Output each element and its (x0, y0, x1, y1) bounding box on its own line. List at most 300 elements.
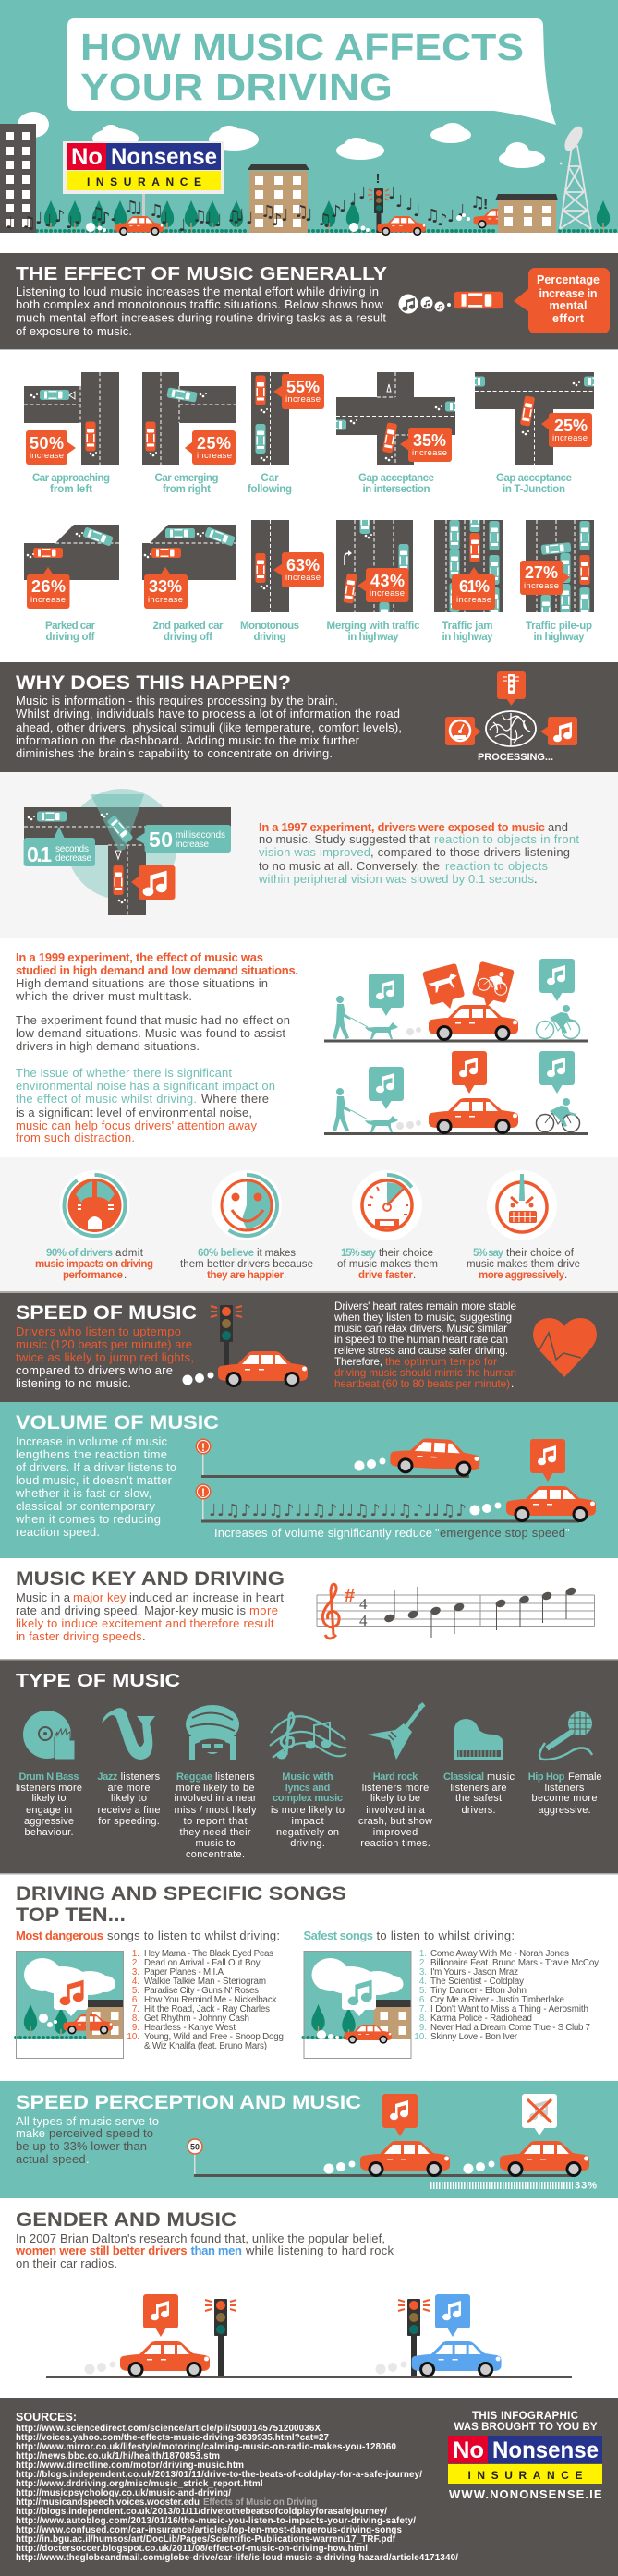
icon: turntable (23, 1711, 75, 1760)
column: drum n bass: listeners more (16, 1783, 82, 1794)
sources list: http://voices.yahoo.com/the-effects-music-driving-3639935.html?cat=27 (16, 2433, 330, 2443)
text (15, 1434, 176, 1539)
list: safest songs: 3. (419, 1967, 427, 1977)
diagram: car approaching from left: from left (50, 484, 92, 495)
diagram: car approaching from left: 50% (30, 434, 64, 453)
text: than men (190, 2243, 242, 2257)
list: dangerous songs: Paradise City - Guns N' Roses (144, 1986, 259, 1996)
column: reggae: Reggae (176, 1772, 212, 1783)
illustration: safe drive (303, 1951, 412, 2059)
body text: Whilst driving, individuals have to process a lot of information the road (16, 707, 400, 720)
text: be up to 33% lower than (16, 2139, 147, 2153)
column: jazz (97, 1772, 161, 1827)
heading: MUSIC KEY AND DRIVING (16, 1568, 285, 1590)
list: safest songs: 4. (419, 1977, 427, 1987)
clouds (18, 112, 545, 168)
list: dangerous songs: Young, Wild and Free - Snoop Dogg (144, 2032, 284, 2042)
column: lyrics: impact (292, 1816, 323, 1827)
column: drum n bass: behaviour. (24, 1827, 74, 1838)
column: lyrics: lyrics and (285, 1783, 330, 1794)
traffic light: ! (375, 171, 381, 187)
text: 1997 experiment: to no music at all. Conversely, the (259, 859, 440, 873)
list: safest songs: Tiny Dancer - Elton John (430, 1986, 527, 1996)
text: . (86, 2152, 90, 2166)
text: perceived speed to (49, 2126, 153, 2140)
caption: Increases of volume significantly reduce (214, 1526, 432, 1540)
list: dangerous songs: 1. (132, 1949, 139, 1959)
list: safest songs: Skinny Love - Bon Iver (430, 2032, 518, 2042)
body text: both complex and monotonous traffic situations. Below shows how (16, 297, 384, 311)
text: 1997 experiment (258, 820, 579, 886)
stat: 90 percent: . (124, 1270, 127, 1281)
text: classical or contemporary (16, 1499, 155, 1513)
chart: no music stopping distance: ! (201, 1441, 205, 1454)
list: safest songs: The Scientist - Coldplay (430, 1977, 524, 1987)
panel: 1997 experiment (0, 772, 618, 938)
column: reggae: miss / most likely (174, 1805, 257, 1816)
diagram: traffic pile-up (520, 520, 594, 643)
diagram: car emerging from right (142, 372, 236, 495)
icon: speed sign (188, 2139, 202, 2154)
panel: driving situations grid (24, 372, 613, 643)
icon: no music bubble (522, 2094, 557, 2135)
text: . (142, 1629, 146, 1643)
stat: 90 percent: admit (115, 1248, 144, 1259)
diagram: gap acceptance in intersection (336, 372, 455, 492)
column: lyrics: is more likely to (271, 1805, 345, 1816)
panel: 1999 experiment text: The experiment found that music had no effect on (16, 1013, 290, 1027)
list: dangerous songs: How You Remind Me - Nickelback (144, 1995, 277, 2005)
column: lyrics: driving. (290, 1838, 325, 1849)
music notes: ♩♫♩♩♪♩♩♫♪♩♫♩♫♩♩♫♩♩♫♩♩♫♪♩♫♩♫♪♩♩♩♩♩♩♩♫♪♩♩♫ (6, 184, 485, 236)
panel: 1999 experiment text (15, 950, 298, 1144)
callout: 50 milliseconds (136, 825, 231, 853)
stat: 90 percent (35, 1170, 153, 1281)
text: on their car radios. (16, 2256, 117, 2270)
heading: DRIVING AND SPECIFIC SONGS (16, 1883, 346, 1905)
sponsor text: THIS INFOGRAPHIC (472, 2411, 578, 2422)
diagram: gap acceptance in T-junction: increase (552, 433, 588, 443)
diagram: car following: 55% (286, 378, 320, 396)
column: jazz: listeners (121, 1772, 161, 1783)
chart: music staff: # (345, 1586, 355, 1606)
sources list (16, 2411, 458, 2563)
column: reggae (174, 1772, 257, 1860)
column: classical: the safest (455, 1793, 502, 1804)
subheadings: songs to listen to whilst driving: (107, 1929, 280, 1942)
sources list: http://blogs.independent.co.uk/2013/01/11/drive-to-the-beats-of-coldplay-for-a-safe-journey/ (16, 2470, 422, 2480)
column: hip hop: aggressive. (538, 1805, 591, 1816)
callout: 0.1 seconds (24, 827, 95, 866)
stat: 5 percent: music makes them drive (467, 1259, 580, 1270)
list: safest songs: 9. (419, 2023, 427, 2033)
column: hip hop: become more (532, 1793, 597, 1804)
chart: music staff: 4 (359, 1595, 368, 1613)
panel: 1999 experiment text: High demand situations are those situations in (16, 976, 268, 990)
stat: 15 percent: of music makes them (337, 1259, 438, 1270)
text: major key (73, 1590, 127, 1604)
list: dangerous songs: 9. (132, 2023, 139, 2033)
subheadings: Most dangerous (16, 1929, 103, 1942)
diagram: merging with traffic: in highway (347, 632, 399, 643)
list: safest songs: 1. (419, 1949, 427, 1959)
text: All types of music serve to (16, 2114, 159, 2128)
list: dangerous songs (127, 1949, 284, 2051)
right text: Therefore, (334, 1355, 382, 1368)
panel: driving and specific songs (16, 1883, 599, 2059)
diagram: car approaching from left: Car approaching (32, 473, 110, 484)
column: hard rock: likely to be (370, 1793, 420, 1804)
right text: in speed to the human heart rate can (334, 1333, 508, 1346)
diagram: traffic jam: in highway (442, 632, 493, 643)
chart: loud music stopping distance (196, 1439, 596, 1522)
list: dangerous songs: Paper Planes - M.I.A (144, 1967, 224, 1977)
panel: the effect of music generally (0, 253, 618, 350)
diagram: traffic jam (434, 520, 503, 643)
left text: music (120 beats per minute) are (16, 1337, 192, 1351)
left text: compared to drivers who are (16, 1363, 173, 1377)
right text: . (511, 1377, 514, 1390)
column: classical: listeners are (451, 1783, 506, 1794)
column: classical: drivers. (462, 1805, 495, 1816)
text: in faster driving speeds (16, 1629, 142, 1643)
diagram: monotonous driving: driving (253, 632, 286, 643)
billboard logo: Nonsense (111, 144, 217, 170)
list: dangerous songs: Hit the Road, Jack - Ray Charles (144, 2004, 270, 2014)
column: lyrics: Music with (282, 1772, 333, 1783)
column: lyrics: negatively on (276, 1827, 339, 1838)
panel: 1999 experiment text: The issue of whether there is significant (16, 1066, 232, 1080)
billboard logo (63, 141, 224, 220)
stat: 60 percent: them better drivers because (180, 1259, 313, 1270)
icon: heart (533, 1318, 597, 1377)
diagram: gap acceptance in T-junction (475, 372, 594, 492)
column: reggae: listeners (215, 1772, 255, 1783)
column: hip hop: Female (568, 1772, 602, 1783)
list: safest songs: 10. (414, 2032, 427, 2042)
chart: no music stopping distance (196, 1436, 480, 1478)
diagram: monotonous driving: 63% (286, 556, 320, 574)
stat: 15 percent (337, 1170, 438, 1281)
column: classical: Classical (443, 1772, 484, 1783)
billboard logo: INSURANCE (87, 175, 201, 188)
left text: Drivers who listen to uptempo (16, 1324, 181, 1338)
text: 1997 experiment: reaction to objects in front (434, 832, 579, 846)
icon: brain processing (445, 671, 577, 763)
diagram: car emerging from right: 25% (197, 434, 231, 453)
diagram: traffic pile-up: increase (524, 581, 559, 591)
sponsor text (454, 2411, 598, 2433)
stat: 60 percent: . (284, 1270, 286, 1281)
diagram: merging with traffic: Merging with traffic (327, 621, 420, 632)
text (16, 1590, 284, 1643)
left text (16, 1324, 194, 1390)
column: jazz: are more (107, 1783, 150, 1794)
panel: volume of music (0, 1402, 618, 1558)
text: of drivers. If a driver listens to (16, 1460, 176, 1474)
right text: when they listen to music, suggesting (333, 1311, 512, 1324)
caption: " (565, 1526, 570, 1540)
text: 1997 experiment: vision was improved (259, 845, 370, 859)
diagram: gap acceptance in T-junction: in T-Junction (503, 484, 565, 495)
callout: percentage increase: Percentage (537, 273, 600, 286)
callout: 0.1 seconds: decrease (55, 853, 91, 864)
sources list: http://news.bbc.co.uk/1/hi/health/1870853.stm (16, 2451, 220, 2461)
stat: 60 percent: they are happier (207, 1270, 285, 1281)
diagram: parked car driving off: increase (30, 595, 66, 605)
column: reggae: music to (196, 1838, 235, 1849)
stat: 90 percent: performance (63, 1270, 123, 1281)
diagram: 2nd parked car driving off: 33% (149, 577, 182, 596)
text: Music in a (16, 1590, 71, 1604)
column: jazz: receive a fine (98, 1805, 161, 1816)
column: lyrics: complex music (273, 1793, 343, 1804)
traffic light (368, 171, 390, 233)
text: women were still better drivers (15, 2243, 188, 2257)
puffs and cars (86, 213, 470, 236)
diagram: traffic pile-up: in highway (534, 632, 585, 643)
list: dangerous songs: Dead on Arrival - Fall Out Boy (144, 1958, 261, 1968)
stat: 60 percent: 60% believe (198, 1248, 254, 1259)
text: induced an increase in heart (129, 1590, 284, 1604)
column: jazz: for speeding. (98, 1816, 160, 1827)
icon: microphone (539, 1711, 592, 1760)
chart: loud music stopping distance: ! (201, 1486, 205, 1499)
list: dangerous songs: 6. (132, 1995, 139, 2005)
stat: 60 percent: it makes (257, 1248, 296, 1259)
column: jazz: likely to (111, 1793, 147, 1804)
column: reggae: they need their (179, 1827, 251, 1838)
heading: WHY DOES THIS HAPPEN? (16, 672, 291, 694)
left text: listening to no music. (16, 1376, 131, 1390)
list: dangerous songs: 4. (132, 1977, 139, 1987)
text: reaction speed. (16, 1525, 100, 1539)
website: WWW.NONONSENSE.IE (449, 2487, 602, 2501)
stat: 15 percent: . (413, 1270, 416, 1281)
diagram: car following: following (248, 484, 292, 495)
diagram: car approaching from left (24, 372, 119, 495)
body text: information on the dashboard. Adding music to the mix further (16, 733, 360, 747)
column: reggae: more likely to be (176, 1783, 255, 1794)
panel: music key and driving (16, 1568, 595, 1643)
body text (16, 694, 402, 760)
column: classical: music (487, 1772, 515, 1783)
sources list: http://doctersoccer.blogspot.co.uk/2011/08/effect-of-music-on-driving-how.html (16, 2544, 368, 2554)
radio tower (560, 125, 591, 229)
text: when it comes to reducing (15, 1512, 161, 1526)
callout: 50 milliseconds: increase (176, 840, 209, 850)
text: more (249, 1603, 278, 1617)
sources list: Effects of Music on Driving (203, 2497, 318, 2508)
text: In 2007 Brian Dalton's research found that, unlike the popular belief, (16, 2231, 385, 2245)
brown building (248, 164, 309, 233)
body text: ahead, other drivers, physical stimuli (like temperature, comfort levels), (16, 720, 402, 734)
speech bubble title: YOUR DRIVING (80, 66, 393, 108)
callout: 0.1 seconds: 0.1 (27, 842, 52, 866)
panel: 1999 experiment text: environmental noise has a significant impact on (16, 1079, 275, 1093)
diagram: car following: increase (285, 394, 321, 405)
stat: 15 percent: their choice (379, 1248, 433, 1259)
text: 1997 experiment: reaction to objects (445, 859, 549, 873)
right text: heartbeat (60 to 80 beats per minute) (334, 1377, 510, 1390)
diagram: car following (248, 372, 324, 495)
icon: notes towards car (399, 292, 503, 314)
caption: " (435, 1526, 440, 1540)
diagram: traffic jam: Traffic jam (442, 621, 493, 632)
right text: music can relax drivers. Music similar (334, 1322, 507, 1335)
list: dangerous songs: 7. (132, 2004, 139, 2014)
stat: 5 percent: their choice of (506, 1248, 575, 1259)
list: safest songs (414, 1949, 599, 2042)
diagram: traffic jam: 61% (459, 577, 490, 596)
column: hard rock: reaction times. (360, 1838, 430, 1849)
column: hard rock (358, 1772, 432, 1849)
sources list: http://www.autoblog.com/2013/01/16/the-music-you-listen-to-impacts-your-driving-safety/ (16, 2516, 416, 2526)
column: classical (443, 1772, 515, 1816)
list: dangerous songs: 2. (132, 1958, 139, 1968)
diagram: 2nd parked car driving off: increase (148, 595, 183, 605)
diagram: car emerging from right: from right (163, 484, 211, 495)
heading: SPEED OF MUSIC (16, 1302, 197, 1324)
right text: relieve stress and cause safer driving. (334, 1344, 508, 1357)
column: lyrics (271, 1772, 345, 1849)
body text: Listening to loud music increases the mental effort while driving in (16, 284, 379, 298)
heading: TYPE OF MUSIC (16, 1671, 180, 1691)
text: 1997 experiment: and (548, 820, 568, 834)
list: dangerous songs: Walkie Talkie Man - Steriogram (144, 1977, 266, 1987)
icon: music bubble (131, 865, 176, 900)
panel: why does this happen (0, 662, 618, 772)
icon: flying V guitar (367, 1704, 424, 1760)
stat: 60 percent (180, 1170, 313, 1281)
panel: 1999 experiment text: Where there (201, 1092, 269, 1106)
bar: 33 percent: 33% (575, 2180, 597, 2191)
list: safest songs: 5. (419, 1986, 427, 1996)
list: dangerous songs: Get Rhythm - Johnny Cash (144, 2014, 249, 2024)
chart: loud music stopping distance: ♩♩♫♪♩♩♫♪♩♩♫♪♩♩♫♪♩♩♫♪♩♩♫♪ (209, 1501, 467, 1520)
body text: much mental effort increases during routine driving tasks as a result (16, 310, 386, 325)
column: reggae: concentrate. (186, 1849, 245, 1860)
sources list: http://musicpsychology.co.uk/music-and-driving/ (16, 2488, 231, 2498)
column: reggae: involved in a near (174, 1793, 257, 1804)
text: 1997 experiment: within peripheral vision was slowed by 0.1 seconds (258, 872, 534, 886)
illustration: low demand situation (324, 1051, 588, 1135)
list: dangerous songs: 5. (132, 1986, 139, 1996)
diagram: 2nd parked car driving off (142, 525, 236, 643)
panel: type of music (0, 1659, 618, 1873)
column: hip hop: listeners (545, 1783, 585, 1794)
chart: music staff: 4 (359, 1612, 368, 1629)
text: 1997 experiment: . (534, 872, 538, 886)
list: safest songs: I'm Yours - Jason Mraz (430, 1967, 518, 1977)
diagram: merging with traffic (327, 520, 419, 643)
panel: driver statistics (0, 1157, 618, 1293)
list: dangerous songs: 8. (132, 2014, 139, 2024)
speech bubble title: HOW MUSIC AFFECTS (80, 26, 524, 68)
callout: percentage increase: mental (549, 299, 588, 312)
sources list: http://www.directline.com/motor/driving-music.htm (16, 2461, 244, 2471)
diagram: peripheral vision (24, 789, 231, 915)
body text: diminishes the brain's capability to concentrate on driving. (16, 746, 333, 760)
icon: reggae listener (186, 1705, 239, 1760)
subheadings (16, 1929, 515, 1942)
header: city scene: ! (483, 197, 488, 212)
diagram: car approaching from left: increase (30, 451, 64, 461)
illustration: road with two cars (46, 2294, 572, 2378)
column: hip hop (528, 1772, 602, 1816)
billboard logo: No (71, 144, 103, 170)
diagram: monotonous driving: increase (285, 573, 321, 583)
panel: 1999 experiment text: is a significant level of environmental noise, (16, 1106, 252, 1119)
panel: gender and music (15, 2209, 572, 2378)
diagram: car emerging from right: Car emerging (155, 473, 218, 484)
sources list: http://musicandspeech.voices.wooster.edu (16, 2497, 200, 2508)
stat: 5 percent (467, 1170, 580, 1281)
sources list: http://www.theglobeandmail.com/globe-drive/car-life/is-loud-music-a-driving-hazard/article4171340/ (16, 2553, 458, 2563)
chart: speed comparison road (188, 2094, 597, 2191)
crash car (474, 209, 523, 228)
column: hard rock: improved (373, 1827, 418, 1838)
traffic light and car (183, 1305, 308, 1387)
heading: SPEED PERCEPTION AND MUSIC (16, 2092, 361, 2113)
right text: driving music should mimic the human (334, 1366, 516, 1379)
text: likely to induce excitement and therefore result (16, 1616, 274, 1630)
panel: 1999 experiment text: the effect of music whilst driving. (16, 1092, 197, 1106)
diagram: monotonous driving: Monotonous (240, 621, 299, 632)
header: city scene (0, 0, 618, 236)
panel: 1999 experiment text: music can help focus drivers' attention away (16, 1119, 257, 1132)
list: dangerous songs: & Wiz Khalifa (feat. Bruno Mars) (144, 2041, 267, 2051)
diagram: gap acceptance in T-junction: 25% (554, 417, 588, 435)
list: safest songs: 8. (419, 2014, 427, 2024)
icon: dog bubble (422, 963, 467, 1013)
text: while listening to hard rock (245, 2243, 394, 2257)
footer logo (448, 2436, 602, 2484)
diagram: traffic pile-up: Traffic pile-up (526, 621, 592, 632)
body text (16, 284, 386, 338)
column: drum n bass: likely to (31, 1793, 67, 1804)
list: safest songs: Karma Police - Radiohead (430, 2014, 532, 2024)
column: drum n bass (16, 1772, 82, 1838)
heading: VOLUME OF MUSIC (16, 1412, 219, 1433)
column: hip hop: Hip Hop (528, 1772, 565, 1783)
sources list: http://www.sciencedirect.com/science/article/pii/S000145751200036X (16, 2424, 321, 2434)
diagram: parked car driving off: Parked car (45, 621, 96, 632)
diagram: parked car driving off: 26% (31, 577, 66, 596)
column: hard rock: involved in a (366, 1805, 426, 1816)
icon: saxophone (102, 1708, 155, 1760)
stat: 15 percent: drive faster (358, 1270, 414, 1281)
icon: brain processing: PROCESSING... (478, 752, 553, 763)
column: drum n bass: Drum N Bass (18, 1772, 79, 1783)
list: dangerous songs: Heartless - Kanye West (144, 2023, 236, 2033)
sources list: http://in.bgu.ac.il/humsos/art/DocLib/Pages/Scientific-Publications-warren/17_TRF.pdf (16, 2534, 396, 2545)
column: reggae: to report that (183, 1816, 248, 1827)
diagram: merging with traffic: increase (370, 588, 405, 599)
text: lengthens the reaction time (16, 1447, 167, 1461)
diagram: 2nd parked car driving off: 2nd parked car (153, 621, 224, 632)
text: 1997 experiment: no music. Study suggested that (259, 832, 430, 846)
diagram: gap acceptance in intersection: in intersection (362, 484, 430, 495)
diagram: gap acceptance in intersection: increase (412, 448, 447, 458)
list: dangerous songs: Hey Mama - The Black Eyed Peas (144, 1949, 273, 1959)
column: hard rock: crash, but show (358, 1816, 432, 1827)
text (15, 2231, 394, 2270)
sources list: http://www.drdriving.org/misc/music_strick_report.html (16, 2479, 263, 2489)
column: drum n bass: aggressive (24, 1816, 74, 1827)
panel: 1999 experiment text: drivers in high demand situations. (16, 1039, 200, 1053)
column: hard rock: Hard rock (373, 1772, 418, 1783)
